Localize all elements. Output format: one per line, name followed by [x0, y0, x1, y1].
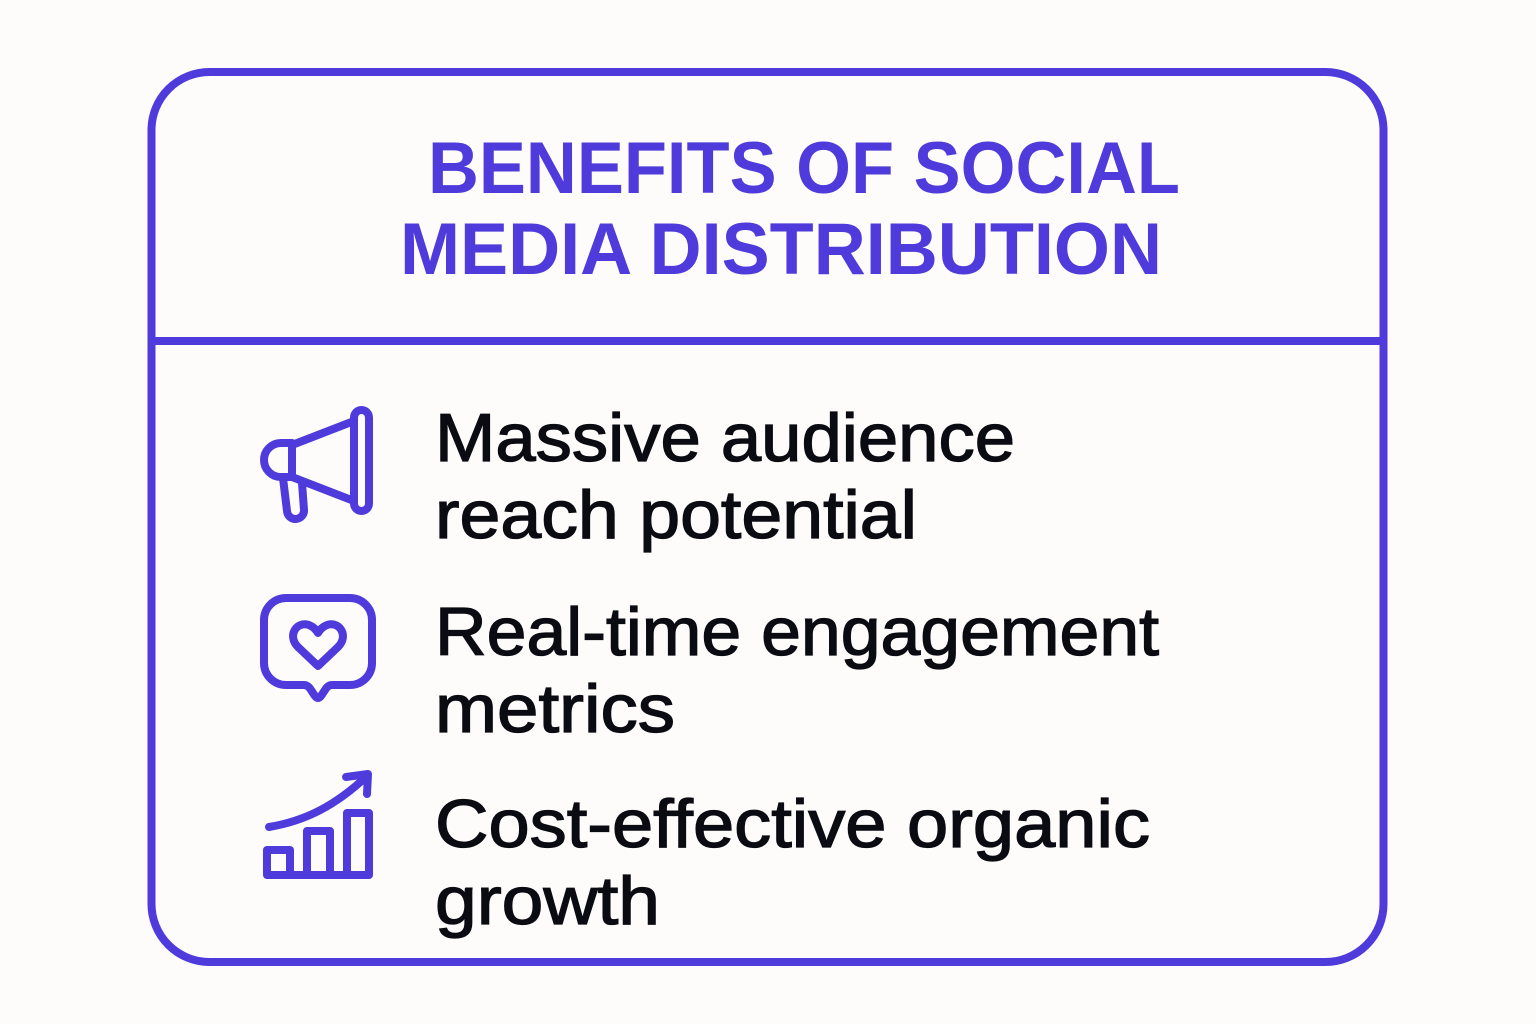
- text: massive audience reach: [435, 400, 1015, 553]
- icon: growth chart: [267, 774, 369, 875]
- icon: megaphone: [264, 410, 369, 519]
- title: MEDIA DISTRIBUTION: [400, 209, 1162, 290]
- text: massive audience reach: reach potential: [435, 477, 917, 553]
- text: real-time engagement: Real-time engagement: [435, 594, 1159, 670]
- icon: heart speech bubble: [264, 598, 372, 698]
- text: massive audience reach: Massive audience: [435, 400, 1015, 476]
- text: cost-effective organic growth: Cost-effective organic: [435, 786, 1150, 862]
- title: BENEFITS OF SOCIAL: [428, 128, 1180, 209]
- text: real-time engagement: metrics: [435, 671, 675, 747]
- panel: benefits card: [152, 72, 1384, 962]
- text: real-time engagement: [435, 594, 1159, 747]
- text: cost-effective organic growth: [435, 786, 1150, 939]
- text: cost-effective organic growth: growth: [435, 863, 660, 939]
- title: [400, 128, 1180, 290]
